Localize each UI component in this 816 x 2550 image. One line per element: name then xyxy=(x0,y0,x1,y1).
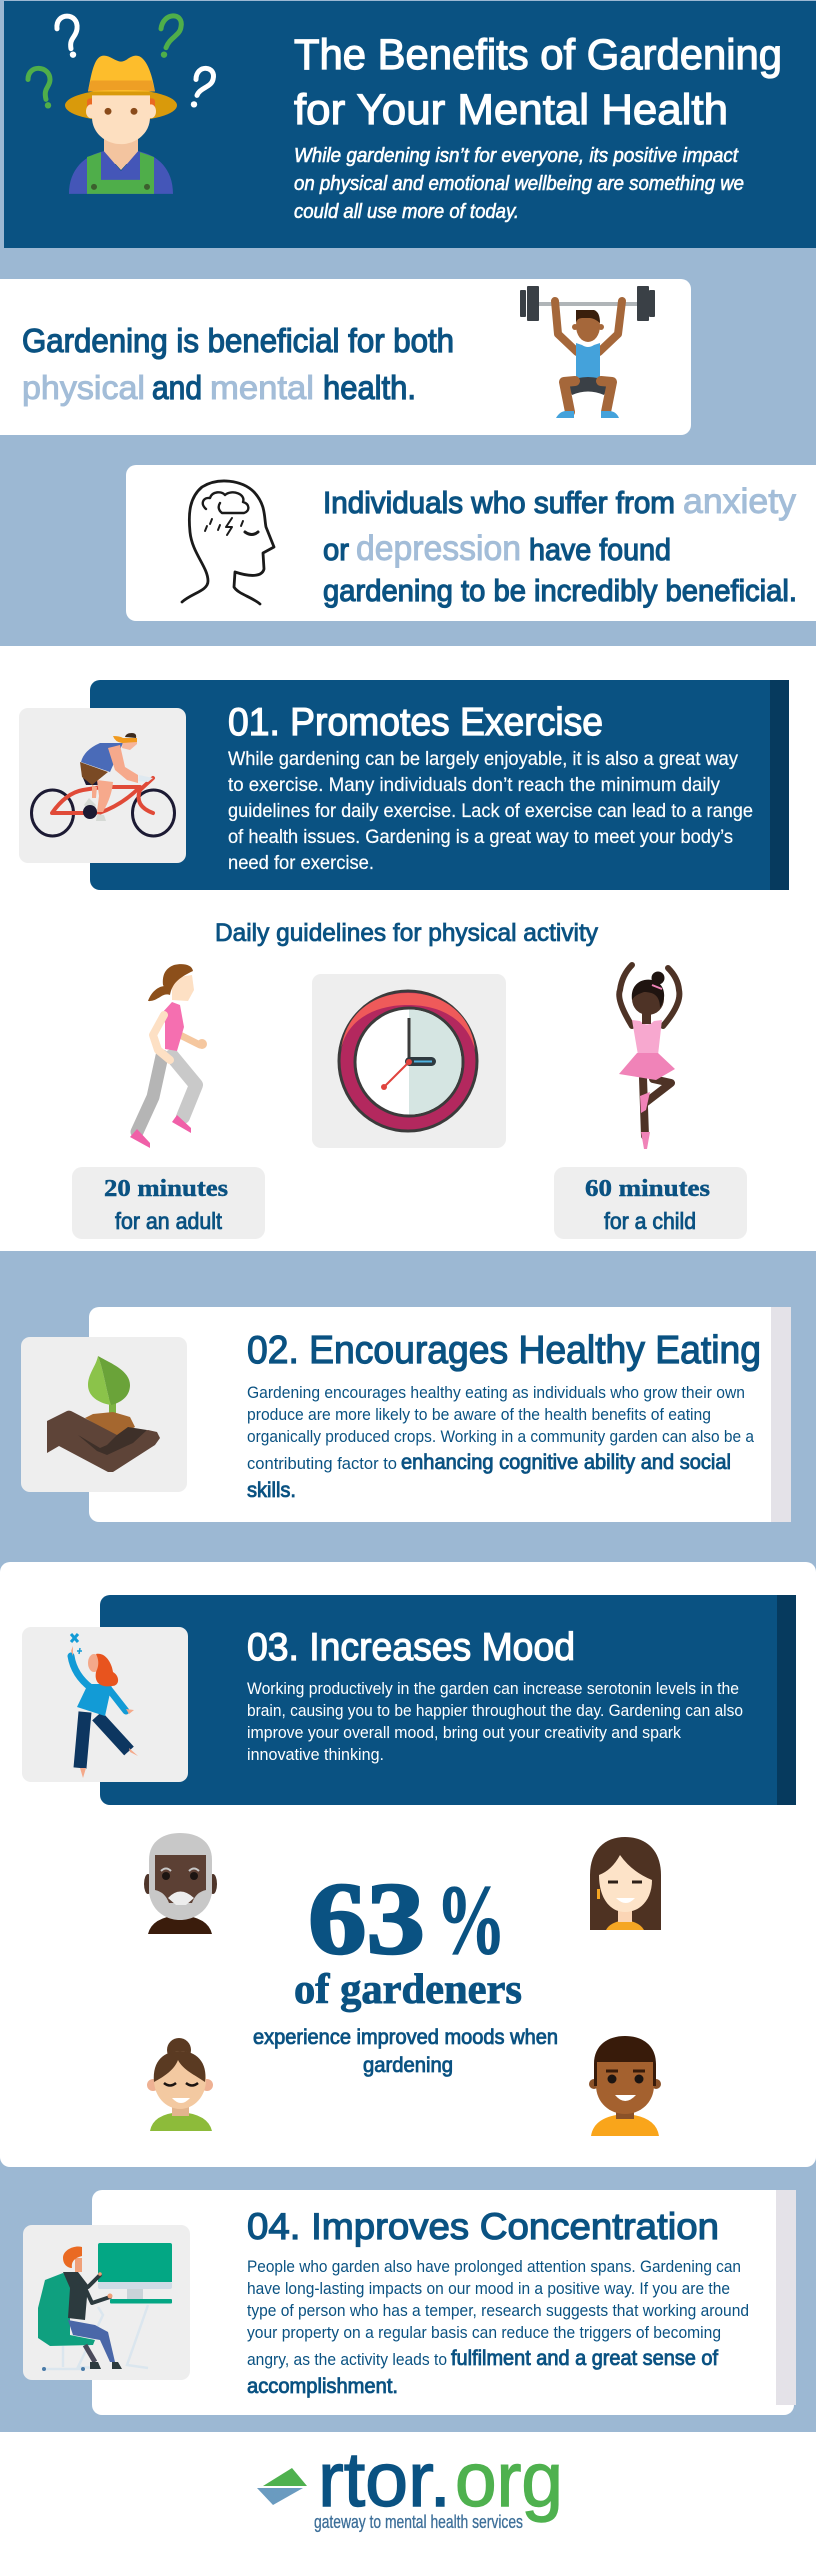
stat label: of gardeners xyxy=(294,1967,522,2013)
panel: 04 improves concentration xyxy=(23,2190,796,2415)
icon: weightlifter xyxy=(520,286,655,418)
stat: 63 percent: 63 xyxy=(308,1862,425,1976)
statement text xyxy=(323,482,797,608)
icon: head with storm cloud xyxy=(182,481,274,604)
stat description: experience improved moods when xyxy=(253,2026,558,2049)
statement text: or xyxy=(323,532,349,567)
logo: rtor.org: gateway to mental health services xyxy=(314,2512,523,2532)
body text: fulfilment and a great sense of xyxy=(451,2347,718,2370)
panel: 03 increases mood xyxy=(22,1595,796,1805)
title: 04. Improves Concentration xyxy=(247,2206,719,2247)
icon: clock xyxy=(312,974,506,1148)
body text: angry, as the activity leads to xyxy=(247,2350,447,2369)
body text: your property on a regular basis can reduce the triggers of becoming xyxy=(247,2323,721,2342)
statement text: Individuals who suffer from xyxy=(323,485,675,520)
icon: man avatar xyxy=(589,2036,661,2136)
section: mood background xyxy=(0,1562,816,2167)
intro text: on physical and emotional wellbeing are something we xyxy=(294,173,744,195)
body text: contributing factor to xyxy=(247,1454,397,1473)
panel: physical and mental health xyxy=(0,279,691,435)
intro text: While gardening isn’t for everyone, its positive impact xyxy=(294,145,739,167)
statement text: mental xyxy=(210,369,314,406)
body text xyxy=(247,1679,743,1764)
title: for Your Mental Health xyxy=(294,86,728,134)
body text: Working productively in the garden can increase serotonin levels in the xyxy=(247,1679,739,1698)
logo: rtor.org: org xyxy=(455,2437,563,2523)
statement text: health. xyxy=(323,369,416,406)
body text: improve your overall mood, bring out your creativity and spark xyxy=(247,1723,681,1742)
logo: rtor.org: rtor. xyxy=(318,2437,451,2523)
stat: 63 percent xyxy=(294,1862,522,2013)
title: 01. Promotes Exercise xyxy=(228,701,603,744)
icon: older man avatar xyxy=(144,1833,217,1934)
body text xyxy=(247,2257,749,2398)
icon: cyclist xyxy=(32,733,174,836)
body text: type of person who has a temper, research suggests that working around xyxy=(247,2301,749,2320)
icon: joyful woman xyxy=(71,1634,138,1778)
statement text: physical xyxy=(22,369,145,406)
body text xyxy=(247,1383,754,1502)
body text: produce are more likely to be aware of the health benefits of eating xyxy=(247,1405,711,1424)
header banner xyxy=(4,1,816,248)
panel: 02 encourages healthy eating xyxy=(21,1307,791,1522)
statement text: Gardening is beneficial for both xyxy=(22,322,454,359)
stat description: gardening xyxy=(363,2054,453,2077)
icon: woman avatar xyxy=(590,1837,661,1930)
body text: have long-lasting impacts on our mood in a positive way. If you are the xyxy=(247,2279,730,2298)
logo: rtor.org xyxy=(257,2437,563,2532)
label: 60 minutes for a child: for a child xyxy=(604,1208,696,1234)
heading: daily guidelines: Daily guidelines for physical activity xyxy=(215,919,598,947)
body text: to exercise. Many individuals don’t reach the minimum daily xyxy=(228,774,720,796)
body text: enhancing cognitive ability and social xyxy=(401,1451,731,1474)
body text: need for exercise. xyxy=(228,852,374,874)
icon: person at computer xyxy=(38,2243,172,2371)
label: 20 minutes for an adult xyxy=(72,1167,265,1239)
statement text: gardening to be incredibly beneficial. xyxy=(323,573,797,608)
label: 60 minutes for a child: 60 minutes xyxy=(585,1176,710,1202)
body text: innovative thinking. xyxy=(247,1745,384,1764)
statement text xyxy=(22,322,454,406)
body text: accomplishment. xyxy=(247,2375,398,2398)
title xyxy=(294,31,782,134)
stat description xyxy=(253,2026,558,2077)
body text: skills. xyxy=(247,1479,296,1502)
panel: anxiety and depression xyxy=(126,465,816,621)
stat: 63 percent: % xyxy=(436,1864,506,1975)
body text: brain, causing you to be happier throughout the day. Gardening can also xyxy=(247,1701,743,1720)
body text: guidelines for daily exercise. Lack of exercise can lead to a range xyxy=(228,800,753,822)
icon: runner xyxy=(130,964,207,1148)
label: 60 minutes for a child xyxy=(554,1167,747,1239)
statement text: depression xyxy=(356,529,521,568)
title: The Benefits of Gardening xyxy=(294,31,782,79)
label: 20 minutes for an adult: 20 minutes xyxy=(104,1176,228,1202)
icon: sprout in hands xyxy=(47,1356,160,1472)
body text: Gardening encourages healthy eating as individuals who grow their own xyxy=(247,1383,745,1402)
intro text: could all use more of today. xyxy=(294,201,519,223)
icon: woman with bun avatar xyxy=(147,2038,213,2131)
panel: 01 promotes exercise xyxy=(19,680,789,890)
intro text xyxy=(294,145,744,223)
icon: confused farmer xyxy=(28,16,214,194)
body text: People who garden also have prolonged attention spans. Gardening can xyxy=(247,2257,741,2276)
body text xyxy=(228,748,753,874)
label: 20 minutes for an adult: for an adult xyxy=(115,1208,223,1234)
statement text: have found xyxy=(529,532,671,567)
statement text: and xyxy=(152,369,202,406)
title: 02. Encourages Healthy Eating xyxy=(247,1329,761,1372)
icon: ballerina xyxy=(619,965,679,1149)
body text: organically produced crops. Working in a community garden can also be a xyxy=(247,1427,754,1446)
body text: While gardening can be largely enjoyable, it is also a great way xyxy=(228,748,738,770)
statement text: anxiety xyxy=(683,482,796,521)
body text: of health issues. Gardening is a great way to meet your body’s xyxy=(228,826,733,848)
title: 03. Increases Mood xyxy=(247,1626,575,1669)
